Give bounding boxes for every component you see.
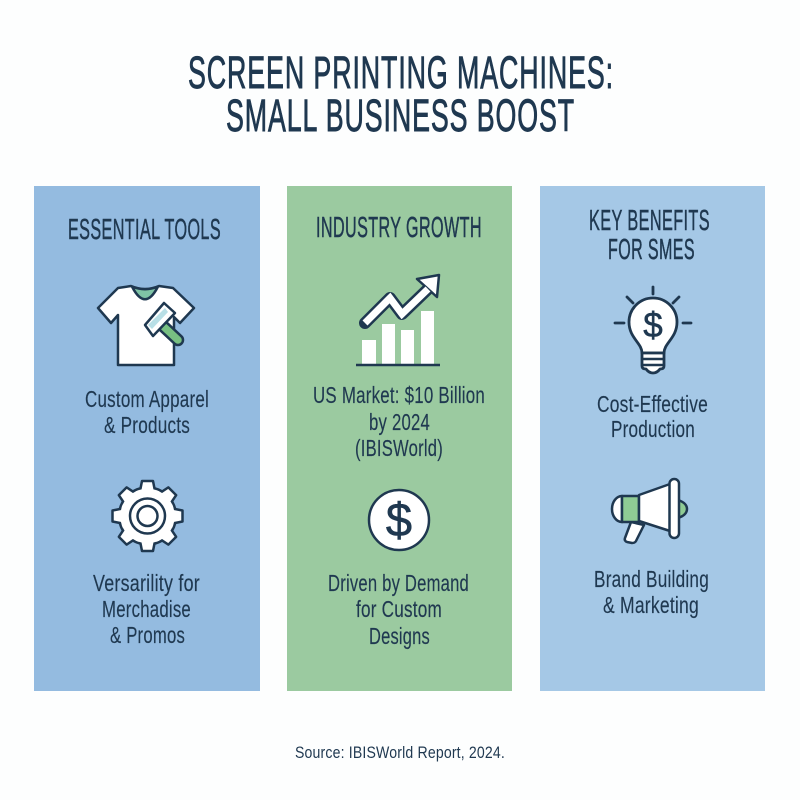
title [188, 47, 614, 141]
text: custom apparel [85, 386, 209, 438]
text: driven by demand [328, 570, 469, 649]
text: cost-effective production: Production [611, 416, 695, 442]
icon: light bulb with dollar [615, 287, 691, 373]
text: brand building: & Marketing [603, 592, 699, 618]
text: brand building: Brand Building [594, 566, 709, 592]
icon: megaphone [612, 479, 687, 543]
text: us market [313, 382, 485, 461]
icon: growth chart [356, 275, 440, 365]
icon: dollar coin: $ [386, 493, 412, 546]
heading: key benefits for smes [589, 205, 710, 266]
text: versatility [93, 570, 200, 648]
text: brand building [594, 566, 709, 618]
icon: t-shirt with squeegee [98, 286, 194, 365]
title: SMALL BUSINESS BOOST [226, 90, 575, 141]
icon: dollar coin [369, 490, 429, 550]
text: us market: US Market: $10 Billion [313, 382, 485, 408]
text: custom apparel: & Products [104, 412, 190, 438]
text: versatility: Versarility for [93, 570, 200, 596]
icon: light bulb with dollar: $ [643, 306, 663, 345]
text: cost-effective production: Cost-Effective [597, 391, 708, 417]
icon: gear [112, 481, 182, 551]
text: us market: (IBISWorld) [355, 435, 443, 461]
panel: key benefits [540, 186, 765, 691]
text: versatility: Merchadise [102, 596, 191, 622]
panel: essential tools [34, 186, 260, 691]
text: us market: by 2024 [369, 409, 430, 435]
panel: industry growth [287, 186, 512, 691]
source note: Source: IBISWorld Report, 2024. [295, 743, 505, 762]
heading: industry growth: INDUSTRY GROWTH [316, 212, 482, 244]
text: driven by demand: Driven by Demand [328, 570, 469, 596]
text: driven by demand: Designs [369, 623, 430, 649]
text: cost-effective production [597, 391, 708, 442]
text: custom apparel: Custom Apparel [85, 386, 209, 412]
heading: key benefits for smes: KEY BENEFITS [589, 205, 710, 237]
heading: essential tools: ESSENTIAL TOOLS [68, 214, 221, 246]
text: driven by demand: for Custom [356, 596, 442, 622]
text: versatility: & Promos [110, 622, 185, 648]
heading: key benefits for smes: FOR SMES [608, 234, 695, 266]
